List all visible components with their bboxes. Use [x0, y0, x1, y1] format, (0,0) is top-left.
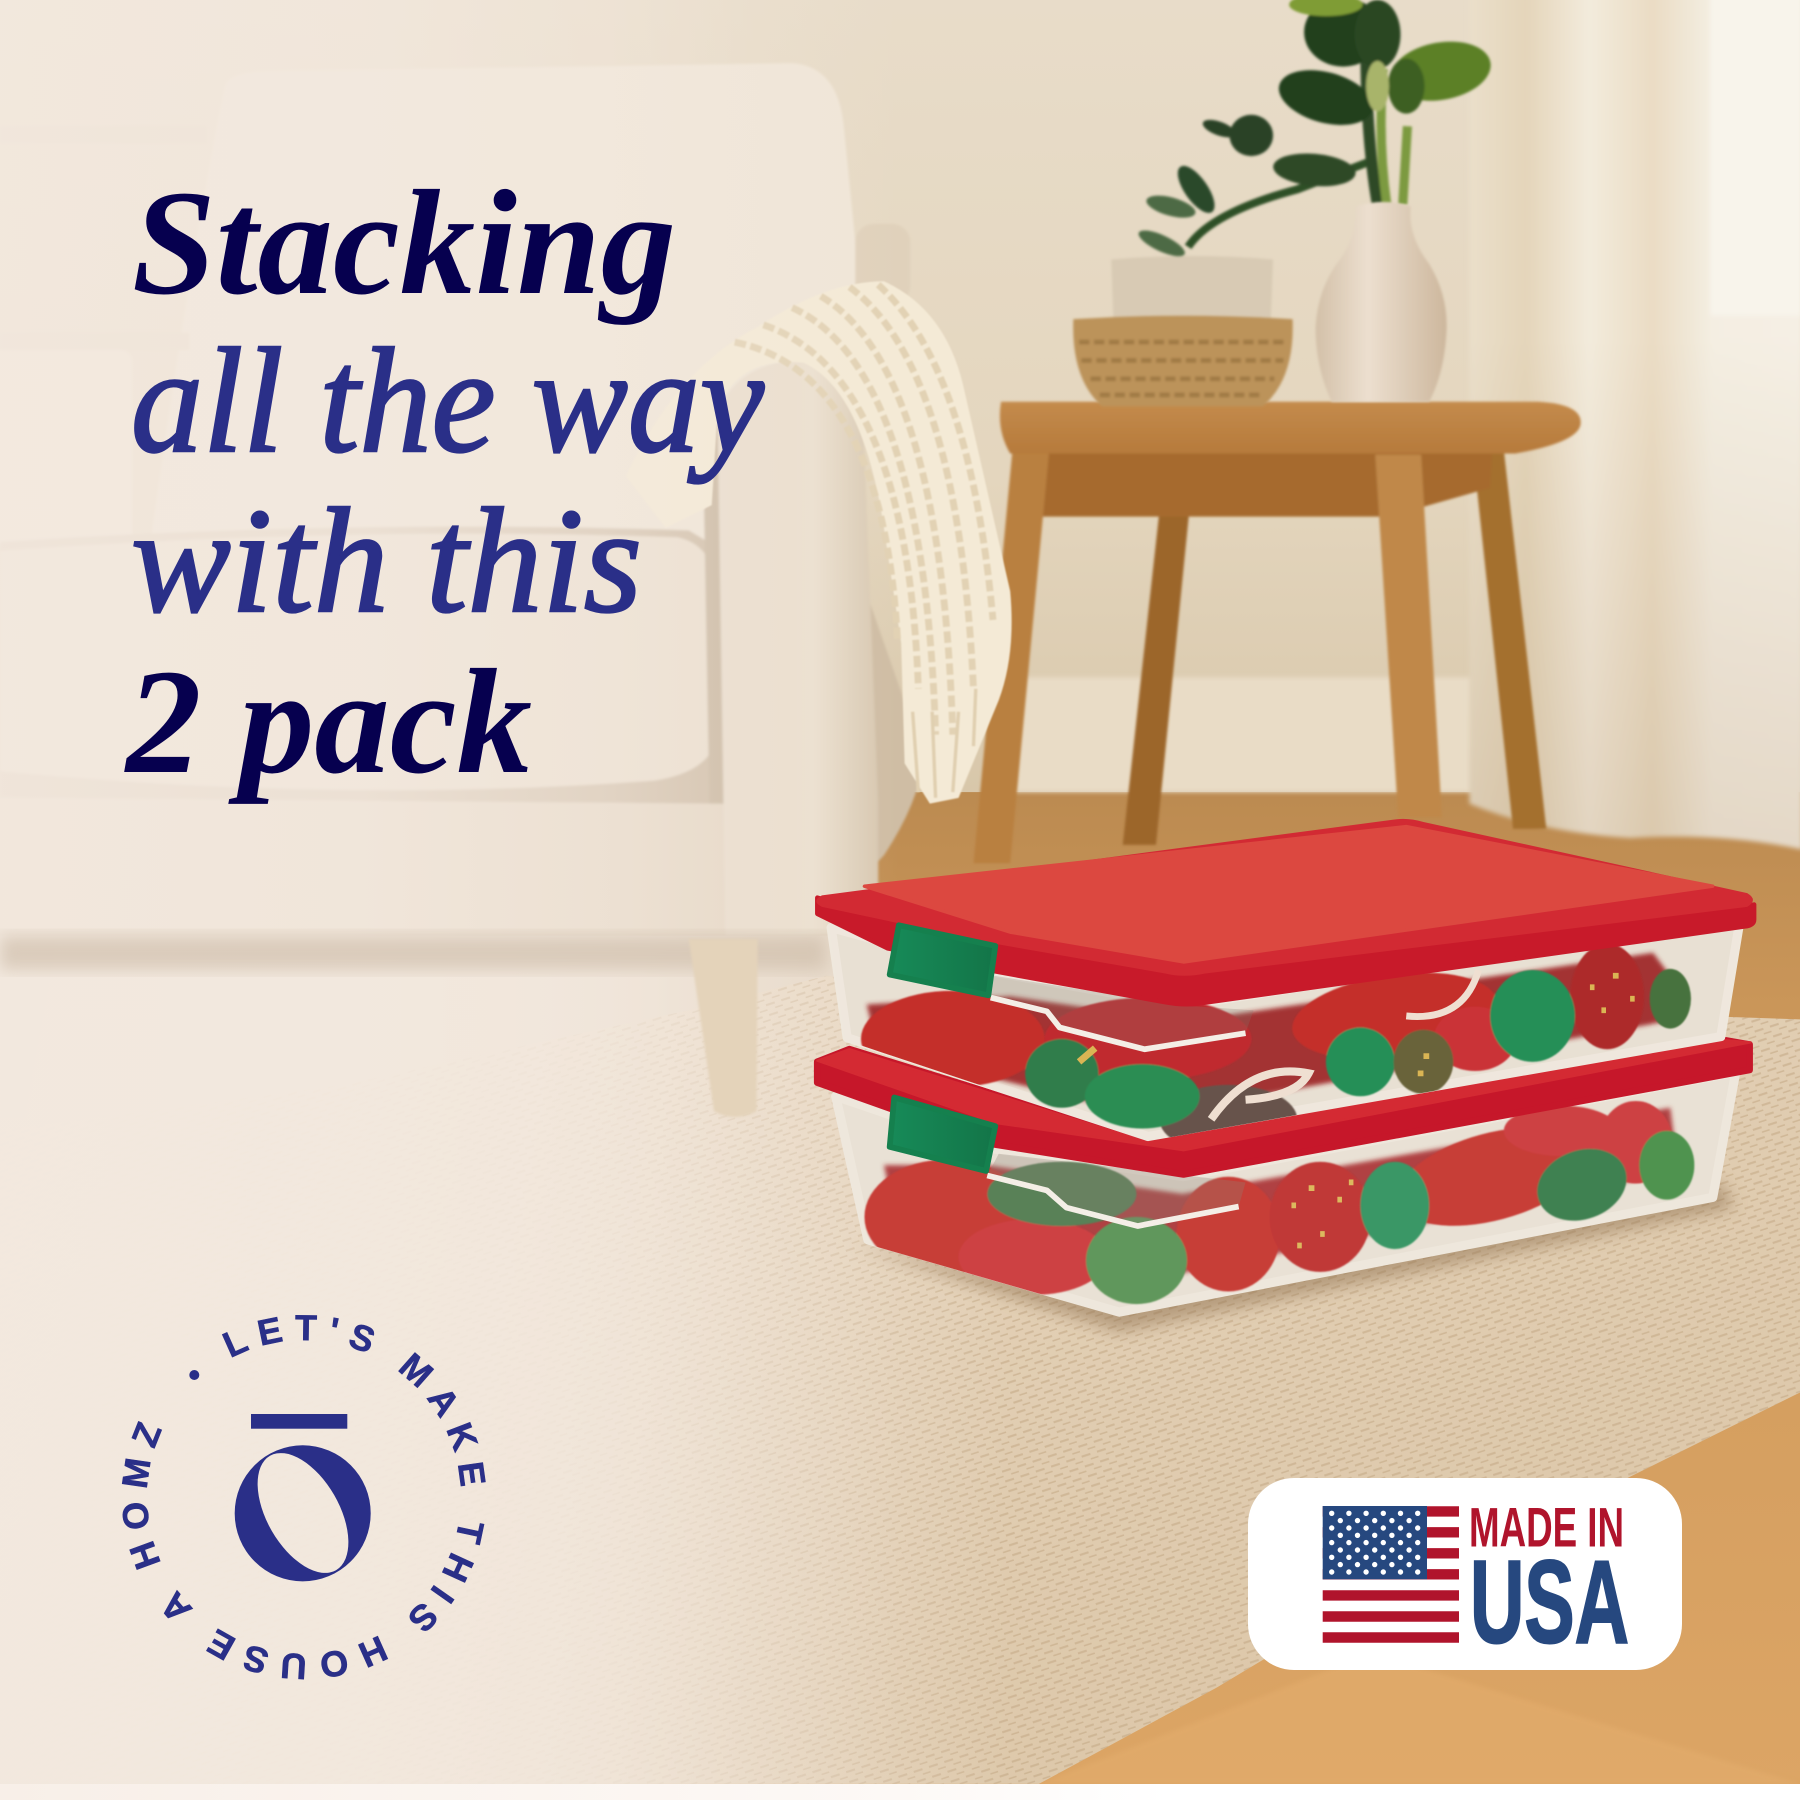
rug [0, 976, 1800, 1784]
seat cushion [0, 534, 716, 790]
floor shadow under boxes [855, 1182, 1733, 1332]
throw blanket [626, 281, 1012, 804]
headline line 4: 2 pack [124, 639, 532, 805]
front right leg [1375, 455, 1442, 817]
badge background [1248, 1478, 1682, 1670]
upper lid recessed top [864, 827, 1713, 962]
upper box latch handle [991, 998, 1246, 1049]
cushion shadow [0, 527, 723, 804]
armchair [0, 63, 924, 1119]
vase [1316, 202, 1447, 402]
floor under chair [0, 792, 838, 1159]
front left leg [973, 450, 1049, 863]
usa text: USA [1470, 1537, 1629, 1669]
baseboard [1010, 677, 1492, 792]
headline line 3: with this [131, 478, 642, 644]
storage box: lower [817, 1040, 1751, 1317]
bottom pale strip [0, 1784, 1800, 1800]
lower box body [836, 1072, 1736, 1312]
wood floor [0, 781, 1800, 1791]
table apron [1039, 450, 1492, 517]
upper box body [831, 918, 1740, 1136]
lower box contents [864, 1101, 1694, 1304]
arm inner shadow [703, 425, 726, 804]
american flag [1323, 1506, 1459, 1643]
left pillow [0, 350, 132, 545]
lower lid top sliver [817, 1040, 1751, 1150]
arm front [717, 359, 878, 936]
ring dot [189, 1370, 199, 1380]
headline [124, 160, 764, 805]
upper box contents [861, 944, 1691, 1154]
ring text: LET'S MAKE THIS HOUSE A HOMZ [122, 1315, 486, 1680]
ceramic pot [1111, 256, 1273, 321]
lower lid [817, 1040, 1749, 1174]
basket [1073, 316, 1293, 406]
lower green clip [890, 1097, 995, 1171]
chair front leg [689, 939, 758, 1117]
far chair leg [0, 939, 57, 1119]
upper lid rim [816, 819, 1753, 976]
made in text: MADE IN [1469, 1496, 1624, 1559]
wall [0, 0, 1800, 792]
upper box milky plastic [829, 918, 1743, 1141]
circular brand logo [122, 1315, 486, 1680]
wall moulding top left [0, 126, 207, 350]
chair back [149, 63, 859, 551]
table top [1000, 402, 1581, 453]
logo letter o [235, 1445, 371, 1581]
floor plank highlight [1039, 1653, 1800, 1784]
lower box latch handle [987, 1176, 1239, 1226]
shadow under armchair [0, 936, 827, 970]
upper green clip [890, 925, 995, 995]
headline line 2: all the way [131, 318, 764, 484]
upper lid side [817, 898, 1754, 1004]
made in usa badge [1248, 1478, 1682, 1670]
chair base [0, 792, 758, 936]
curtain [1469, 0, 1800, 849]
headline line 1: Stacking [132, 160, 676, 326]
back side sliver [855, 224, 910, 304]
plant [1135, 0, 1495, 261]
storage box: upper [816, 819, 1754, 1154]
lower cream fade overlay [0, 936, 1800, 1800]
arm side [735, 413, 924, 936]
back right leg [1473, 450, 1546, 829]
back left leg [1123, 511, 1189, 845]
side table [973, 402, 1581, 863]
lower box milky plastic [832, 1072, 1739, 1317]
logo bar [251, 1414, 347, 1429]
